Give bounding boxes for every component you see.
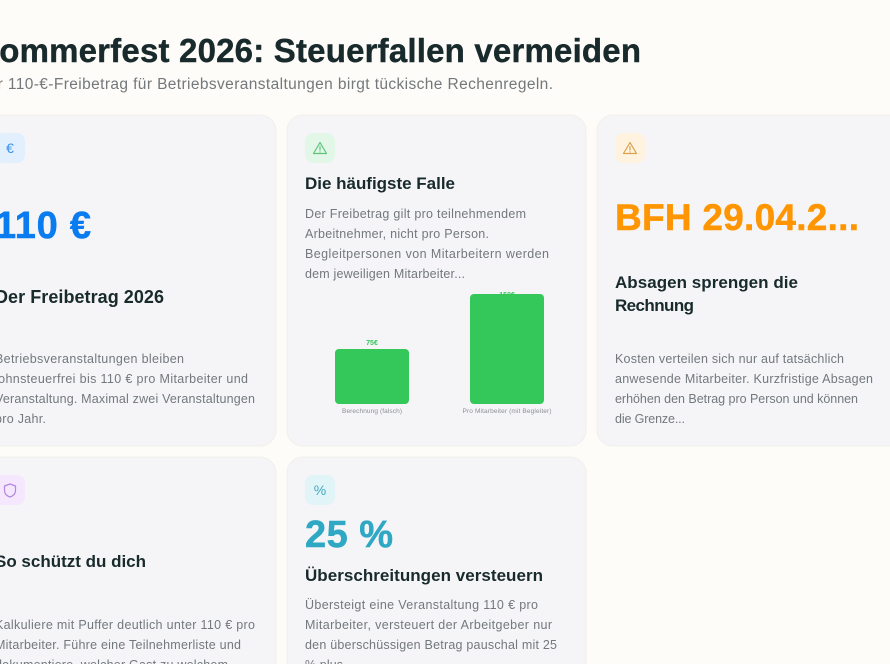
big number: BFH date: BFH 29.04.2... <box>615 197 859 238</box>
body text: Mitarbeiter. Führe eine Teilnehmerliste und <box>0 638 241 652</box>
heading: Die häufigste Falle <box>305 174 455 193</box>
bar chart <box>335 292 552 415</box>
icon: green warning triangle <box>305 133 335 163</box>
big number: 25 %: 25 % <box>305 514 393 556</box>
heading <box>615 273 798 315</box>
body text <box>0 618 255 664</box>
body text: Übersteigt eine Veranstaltung 110 € pro <box>305 598 538 612</box>
icon: orange warning triangle <box>615 133 645 163</box>
panel: Die häufigste Falle <box>287 115 586 446</box>
body text: lohnsteuerfrei bis 110 € pro Mitarbeiter und <box>0 372 248 386</box>
panel: Überschreitungen versteuern <box>287 457 586 664</box>
body text: dem jeweiligen Mitarbeiter... <box>305 267 465 281</box>
body text: Arbeitnehmer, nicht pro Person. <box>305 227 489 241</box>
body text <box>0 352 255 426</box>
body text: erhöhen den Betrag pro Person und können <box>615 392 858 406</box>
bar chart: Pro Mitarbeiter (mit Begleiter) <box>462 408 552 415</box>
panel: Der Freibetrag 2026 <box>0 115 276 446</box>
panel: So schützt du dich <box>0 457 276 664</box>
icon: shield <box>0 475 25 505</box>
body text: Mitarbeiter, versteuert der Arbeitgeber nur <box>305 618 552 632</box>
bar chart: 75€ <box>366 340 378 347</box>
body text: Betriebsveranstaltungen bleiben <box>0 352 184 366</box>
body text: Kalkuliere mit Puffer deutlich unter 110 € pro <box>0 618 255 632</box>
body text: den überschüssigen Betrag pauschal mit 25 <box>305 638 557 652</box>
icon: euro <box>0 133 25 163</box>
icon: percent: % <box>314 482 326 498</box>
icon: euro: € <box>6 140 14 156</box>
heading: Der Freibetrag 2026 <box>0 287 164 307</box>
panel: Absagen sprengen die Rechnung <box>597 115 890 446</box>
body text: Der Freibetrag gilt pro teilnehmendem <box>305 207 526 221</box>
body text <box>615 352 873 426</box>
bar chart: Berechnung (falsch) <box>342 408 402 415</box>
body text <box>305 207 549 281</box>
heading: Absagen sprengen die <box>615 273 798 292</box>
body text: anwesende Mitarbeiter. Kurzfristige Absagen <box>615 372 873 386</box>
body text: die Grenze... <box>615 412 685 426</box>
body text: Kosten verteilen sich nur auf tatsächlich <box>615 352 844 366</box>
body text <box>305 598 557 664</box>
body text: Veranstaltung. Maximal zwei Veranstaltungen <box>0 392 255 406</box>
header <box>0 32 641 93</box>
bar chart: 150€ <box>499 292 515 299</box>
icon: percent <box>305 475 335 505</box>
heading: Überschreitungen versteuern <box>305 566 543 585</box>
body text: Begleitpersonen von Mitarbeitern werden <box>305 247 549 261</box>
heading: Rechnung <box>615 296 694 315</box>
